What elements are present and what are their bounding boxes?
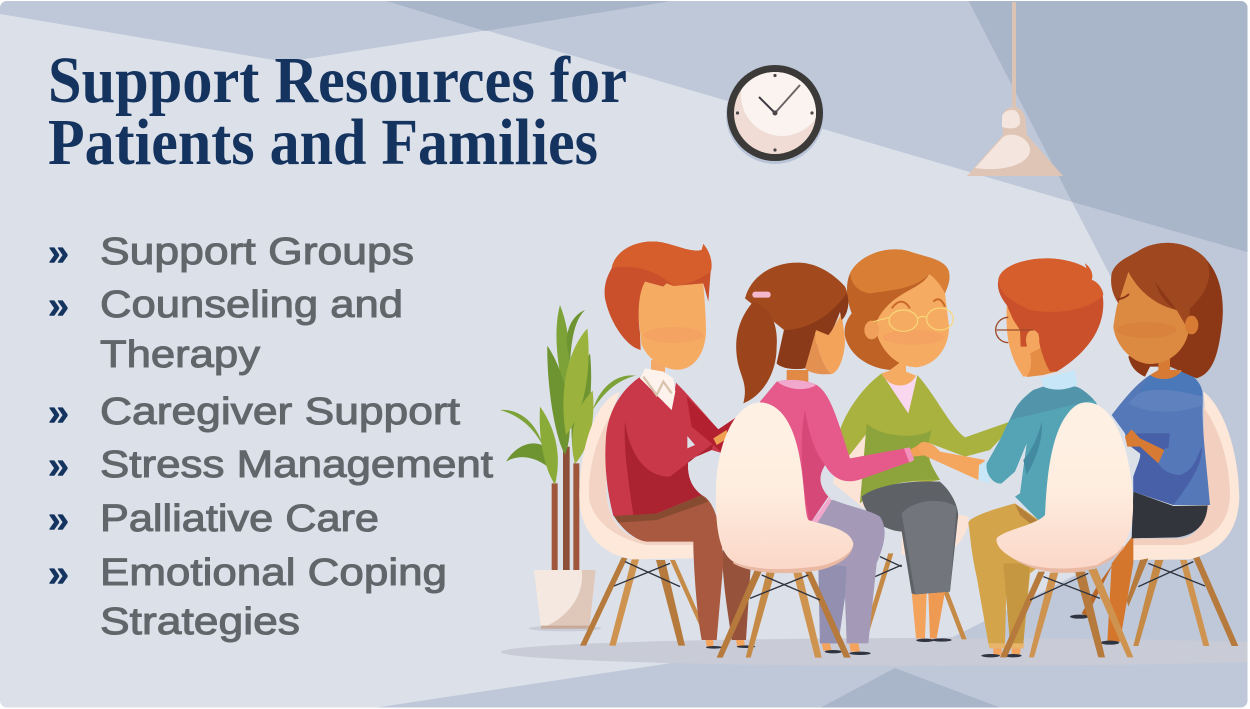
- item: support groups: Support Groups: [100, 231, 414, 273]
- item: caregiver support: Caregiver Support: [100, 391, 461, 433]
- item: counseling and therapy: Therapy: [100, 334, 260, 376]
- item: emotional coping strategies: Emotional Coping: [100, 552, 447, 594]
- figure: girl in pink with front chair: [716, 263, 933, 658]
- item: counseling and therapy: [48, 284, 403, 376]
- item: emotional coping strategies: »: [48, 553, 69, 595]
- item: support groups: »: [48, 232, 69, 274]
- item: counseling and therapy: Counseling and: [100, 284, 403, 326]
- item: caregiver support: »: [48, 392, 69, 434]
- item: stress management: Stress Management: [100, 444, 493, 486]
- item: stress management: »: [48, 445, 69, 487]
- icon: wall clock: [726, 65, 823, 164]
- figure: man in teal with front chair: [918, 258, 1133, 657]
- figure: man in red on left chair: [579, 241, 755, 649]
- title: Patients and Families: [48, 106, 598, 179]
- item: palliative care: Palliative Care: [100, 498, 379, 540]
- icon: potted plant: [500, 305, 636, 631]
- item: emotional coping strategies: [48, 552, 447, 643]
- title: Support Resources for: [48, 44, 627, 117]
- title: [48, 44, 627, 179]
- item: emotional coping strategies: Strategies: [100, 601, 300, 643]
- figure: woman in blue on right chair: [1070, 243, 1239, 646]
- item: counseling and therapy: »: [48, 285, 69, 327]
- item: palliative care: »: [48, 499, 69, 541]
- icon: hanging lamp: [967, 2, 1063, 176]
- figure: woman in green on back chair: [822, 249, 1012, 642]
- bullet list: [48, 231, 493, 643]
